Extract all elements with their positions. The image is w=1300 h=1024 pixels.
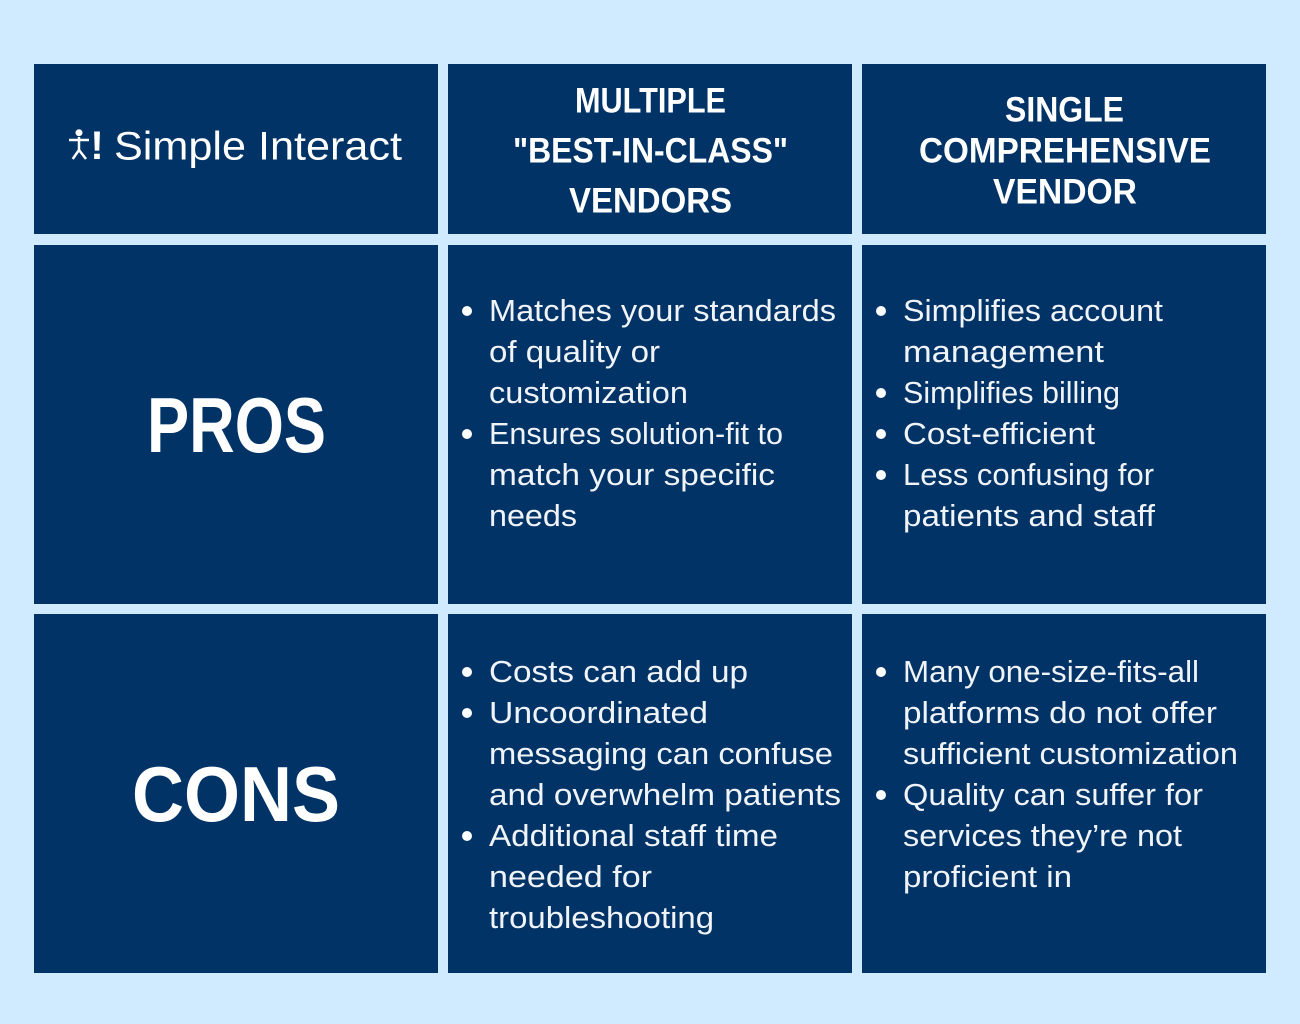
list: pros of single vendor: Cost-efficient xyxy=(903,417,1096,451)
heading: single comprehensive vendor: COMPREHENSIVE xyxy=(919,130,1211,170)
heading: multiple best-in-class vendors: MULTIPLE xyxy=(575,80,726,120)
list: pros of multiple vendors: of quality or xyxy=(489,335,660,369)
panel: cons of multiple vendors xyxy=(448,614,852,973)
panel: single vendor header xyxy=(862,64,1266,234)
panel: pros label xyxy=(34,245,438,604)
panel: pros of multiple vendors xyxy=(448,245,852,604)
list: pros of single vendor xyxy=(876,294,1164,533)
list: pros of multiple vendors xyxy=(462,294,836,533)
heading: pros: PROS xyxy=(147,383,326,469)
list: pros of multiple vendors: match your specific xyxy=(489,458,775,492)
heading: single comprehensive vendor: VENDOR xyxy=(993,172,1137,212)
heading: single comprehensive vendor: SINGLE xyxy=(1005,90,1124,130)
panel: pros of single vendor xyxy=(862,245,1266,604)
panel: cons label xyxy=(34,614,438,973)
list: cons of single vendor: proficient in xyxy=(903,860,1072,894)
list: cons of multiple vendors: Uncoordinated xyxy=(489,696,708,730)
heading: multiple best-in-class vendors: VENDORS xyxy=(569,180,732,220)
panel: logo xyxy=(34,64,438,234)
list: pros of multiple vendors: Matches your standards xyxy=(489,294,836,328)
heading: multiple best-in-class vendors xyxy=(513,80,788,220)
list: pros of multiple vendors: needs xyxy=(489,499,577,533)
list: pros of single vendor: Simplifies billing xyxy=(903,376,1120,410)
heading: cons: CONS xyxy=(132,752,340,838)
list: cons of multiple vendors xyxy=(462,655,841,935)
list: cons of single vendor: sufficient customization xyxy=(903,737,1238,771)
logo exclamation mark: ! xyxy=(90,124,104,168)
panel: cons of single vendor xyxy=(862,614,1266,973)
list: pros of single vendor: patients and staff xyxy=(903,499,1156,533)
list: pros of single vendor: Less confusing for xyxy=(903,458,1154,492)
list: cons of single vendor: Quality can suffer for xyxy=(903,778,1203,812)
list: pros of single vendor: management xyxy=(903,335,1105,369)
list: cons of multiple vendors: Additional staff time xyxy=(489,819,778,853)
list: cons of multiple vendors: needed for xyxy=(489,860,652,894)
list: pros of multiple vendors: customization xyxy=(489,376,688,410)
list: cons of single vendor: Many one-size-fits-all xyxy=(903,655,1199,689)
list: cons of single vendor: platforms do not offer xyxy=(903,696,1217,730)
list: pros of single vendor: Simplifies account xyxy=(903,294,1164,328)
list: pros of multiple vendors: Ensures solution-fit to xyxy=(489,417,783,451)
panel: multiple vendors header xyxy=(448,64,852,234)
heading: multiple best-in-class vendors: "BEST-IN-CLASS" xyxy=(513,130,788,170)
list: cons of multiple vendors: Costs can add up xyxy=(489,655,748,689)
heading: single comprehensive vendor xyxy=(919,90,1211,212)
icon: stick figure xyxy=(69,129,89,159)
list: cons of single vendor: services they’re not xyxy=(903,819,1183,853)
logo wordmark: Simple Interact xyxy=(114,124,402,168)
list: cons of multiple vendors: troubleshooting xyxy=(489,901,714,935)
list: cons of single vendor xyxy=(876,655,1238,894)
list: cons of multiple vendors: and overwhelm patients xyxy=(489,778,841,812)
list: cons of multiple vendors: messaging can confuse xyxy=(489,737,833,771)
